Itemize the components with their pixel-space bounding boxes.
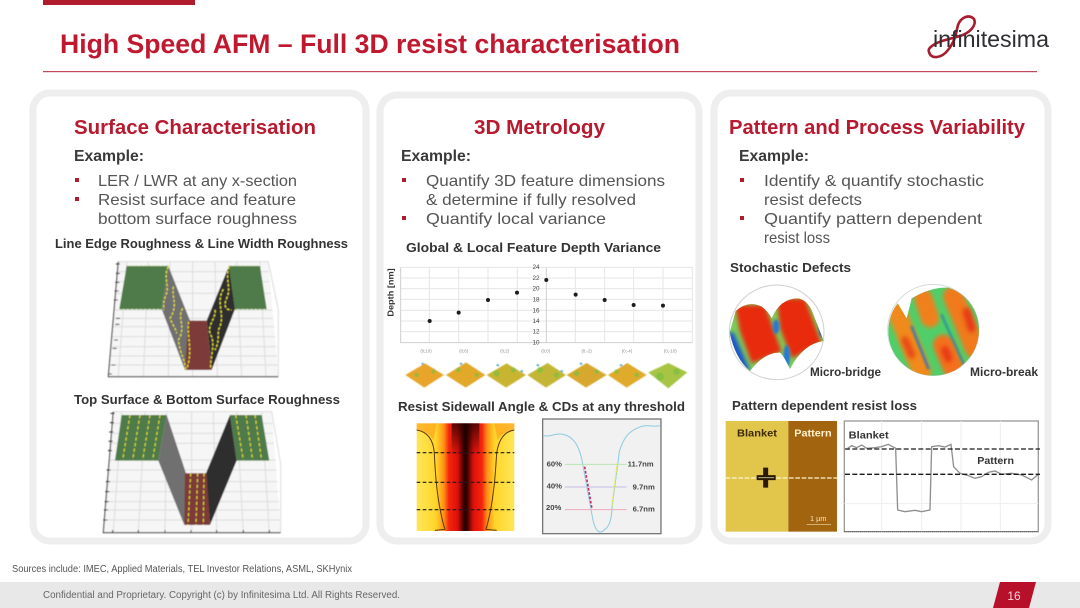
text: example list xyxy=(74,148,297,228)
chart: feature depth scatter: (0;-2) xyxy=(581,349,592,354)
surface map thumbnails xyxy=(405,362,687,388)
chart: feature depth scatter: (0;-10) xyxy=(664,349,677,354)
subheading: pattern dependent resist loss: Pattern dependent resist loss xyxy=(732,398,917,413)
label: micro-bridge: Micro-bridge xyxy=(810,365,881,379)
chart: feature depth scatter: 20 xyxy=(532,286,540,293)
header accent bar xyxy=(43,0,195,5)
heading: pattern and process variability: Pattern and Process Variability xyxy=(729,117,1026,139)
subheading: sidewall angle: Resist Sidewall Angle & CDs at any threshold xyxy=(398,399,685,414)
axis label: depth: Depth [nm] xyxy=(385,268,395,317)
text: example list: Example: xyxy=(739,148,809,165)
text: example list: & determine if fully resolved xyxy=(426,192,636,209)
text: example list: Identify & quantify stochastic xyxy=(764,173,984,190)
chart: feature depth scatter: (0;-4) xyxy=(622,349,633,354)
chart: feature depth scatter: 24 xyxy=(532,264,540,271)
label: micro-break: Micro-break xyxy=(970,365,1038,379)
chart: feature depth scatter: 22 xyxy=(532,275,540,282)
chart: feature depth scatter: 14 xyxy=(532,318,540,325)
text: example list xyxy=(401,148,665,228)
chart: height profile: Pattern xyxy=(977,456,1014,467)
chart: feature depth scatter: 16 xyxy=(532,307,540,314)
chart: feature depth scatter xyxy=(385,264,692,354)
title: High Speed AFM – Full 3D resist characterisation xyxy=(60,29,680,59)
panel: 3D metrology xyxy=(380,95,699,541)
text: example list: Resist surface and feature xyxy=(98,192,296,209)
chart: feature depth scatter: 12 xyxy=(532,329,540,336)
chart: CD profile at thresholds: 20% xyxy=(546,503,561,512)
subheading: stochastic defects: Stochastic Defects xyxy=(730,260,851,275)
chart: CD profile at thresholds: 60% xyxy=(547,459,562,468)
chart: CD profile at thresholds: 6.7nm xyxy=(633,504,655,513)
panel: pattern and process variability xyxy=(714,93,1048,541)
image: micro-break surface xyxy=(885,283,982,377)
logo: infinitesima xyxy=(929,17,1049,57)
text: example list: Example: xyxy=(401,148,471,165)
text: example list: resist loss xyxy=(764,230,830,247)
chart: feature depth scatter: 18 xyxy=(532,296,540,303)
chart: CD profile at thresholds: 9.7nm xyxy=(633,483,655,492)
title rule xyxy=(43,71,1037,72)
panel: surface characterisation xyxy=(33,93,366,541)
logo: infinitesima: infinitesima xyxy=(933,26,1049,52)
footer text: Confidential and Proprietary. Copyright (c) by Infinitesima Ltd. All Rights Reserved. xyxy=(43,590,400,601)
chart: feature depth scatter: (0;0) xyxy=(541,349,551,354)
chart: CD profile at thresholds: 11.7nm xyxy=(628,459,654,468)
text: example list xyxy=(739,148,984,247)
image: AFM blanket and pattern map: 1 µm xyxy=(810,514,826,523)
chart: CD profile at thresholds xyxy=(543,419,661,534)
chart: feature depth scatter: (0;10) xyxy=(420,349,432,354)
heatmap: resist cross-section xyxy=(417,423,514,531)
text: example list: LER / LWR at any x-section xyxy=(98,173,297,190)
page number tab xyxy=(993,582,1036,608)
image: AFM blanket and pattern map: Pattern xyxy=(794,428,832,439)
chart: height profile: Blanket xyxy=(849,431,890,442)
text: example list: resist defects xyxy=(764,192,862,209)
text: example list: Example: xyxy=(74,148,144,165)
chart: height profile xyxy=(844,421,1040,532)
image: micro-bridge surface xyxy=(725,285,828,380)
footer band xyxy=(0,582,1080,608)
chart: CD profile at thresholds: 40% xyxy=(547,482,562,491)
subheading: depth variance: Global & Local Feature Depth Variance xyxy=(406,240,661,255)
heading: 3D metrology: 3D Metrology xyxy=(474,117,606,139)
image: AFM blanket and pattern map xyxy=(726,421,837,532)
heading: surface characterisation: Surface Characterisation xyxy=(74,117,316,139)
text: example list: Quantify pattern dependent xyxy=(764,211,983,228)
sources note: Sources include: IMEC, Applied Materials, TEL Investor Relations, ASML, SKHynix xyxy=(12,564,352,575)
chart: 3D trench with edge roughness lines xyxy=(108,262,278,377)
image: AFM blanket and pattern map: Blanket xyxy=(737,428,778,439)
chart: feature depth scatter: 10 xyxy=(532,340,540,347)
chart: 3D trench with surface roughness lines xyxy=(103,412,281,533)
text: example list: Quantify local variance xyxy=(426,211,606,228)
chart: feature depth scatter: (0;6) xyxy=(459,349,469,354)
subheading: LER and LWR: Line Edge Roughness & Line Width Roughness xyxy=(55,236,348,251)
text: example list: Quantify 3D feature dimensions xyxy=(426,173,665,190)
subheading: top and bottom roughness: Top Surface & Bottom Surface Roughness xyxy=(74,392,340,407)
chart: feature depth scatter: (0;2) xyxy=(500,349,510,354)
page number tab: 16 xyxy=(1007,589,1021,603)
text: example list: bottom surface roughness xyxy=(98,211,297,228)
